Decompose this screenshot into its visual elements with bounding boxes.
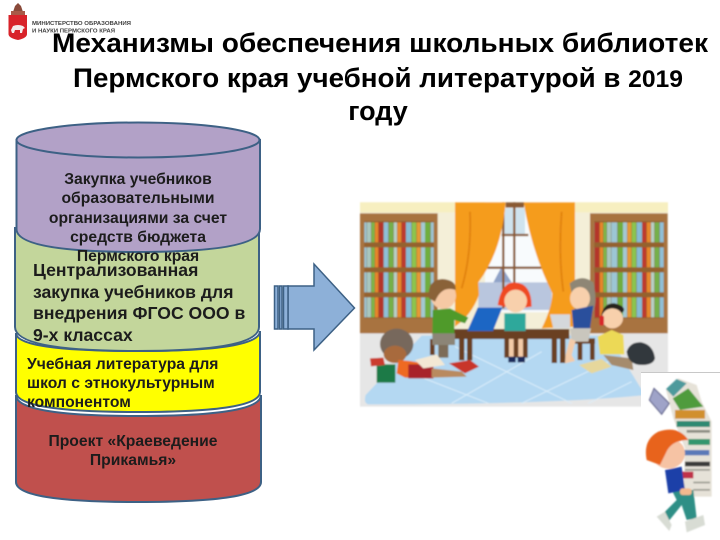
sneakers [657,512,705,532]
book stack [649,378,712,497]
illustration: children in the library [360,202,668,407]
layer: Закупка учебников: Пермского края [77,248,199,265]
layer: Централизованная закупка [15,228,259,351]
window [478,202,552,312]
curtains [455,202,575,328]
rug [365,336,645,404]
books on floor [579,359,612,373]
ministry name [32,21,131,34]
logo: ministry of education of Perm Krai [8,3,131,40]
layer: Закупка учебников: организациями за счет [49,210,227,227]
layer: Централизованная закупка: закупка учебников для [33,282,234,302]
layer: Учебная литература [16,331,260,412]
table [430,329,595,363]
layer: Централизованная закупка: внедрения ФГОС ООО в [33,303,246,323]
wall [360,202,668,333]
child: boy with headphones [598,303,633,370]
torso [665,467,685,493]
ministry name: МИНИСТЕРСТВО ОБРАЗОВАНИЯ [32,21,131,27]
layer: Закупка учебников [16,122,260,265]
layer: Проект «Краеведение Прикамья»: Прикамья» [90,452,176,469]
child: girl with red hair [498,282,532,362]
layer: Закупка учебников: образовательными [61,190,215,207]
layer: Проект «Краеведение Прикамья»: Проект «Краеведение [48,433,218,450]
illustration: boy carrying books [641,372,720,540]
speaker [627,342,655,365]
white backing [641,372,720,540]
layer: Закупка учебников: средств бюджета [70,229,206,246]
title: Механизмы обеспечения школьных библиотек [52,28,708,58]
right bookshelf [590,213,668,333]
floor [360,333,668,407]
cylinder diagram [15,122,261,502]
child: girl with grey hair [565,278,595,363]
laptops [467,308,570,331]
title: году [348,96,408,126]
child: boy lying on floor [370,329,479,383]
legs [662,490,697,522]
title [52,28,708,126]
layer: Учебная литература: компонентом [27,394,131,411]
child: boy in green [429,279,468,358]
layer: Централизованная закупка: Централизованная [33,260,198,280]
head [652,438,685,469]
icon: coat of arms [8,3,27,40]
ministry name: И НАУКИ ПЕРМСКОГО КРАЯ [32,28,115,34]
layer: Централизованная закупка: 9-х классах [33,325,133,345]
layer: Проект «Краеведение Прикамья» [16,395,261,502]
arrow [274,264,354,350]
layer: Учебная литература: Учебная литература для [27,356,218,373]
layer: Закупка учебников: Закупка учебников [64,171,212,188]
layer: Учебная литература: школ с этнокультурным [27,375,215,392]
left bookshelf [360,213,438,333]
title: Пермского края учебной литературой в 2019 [73,63,683,93]
